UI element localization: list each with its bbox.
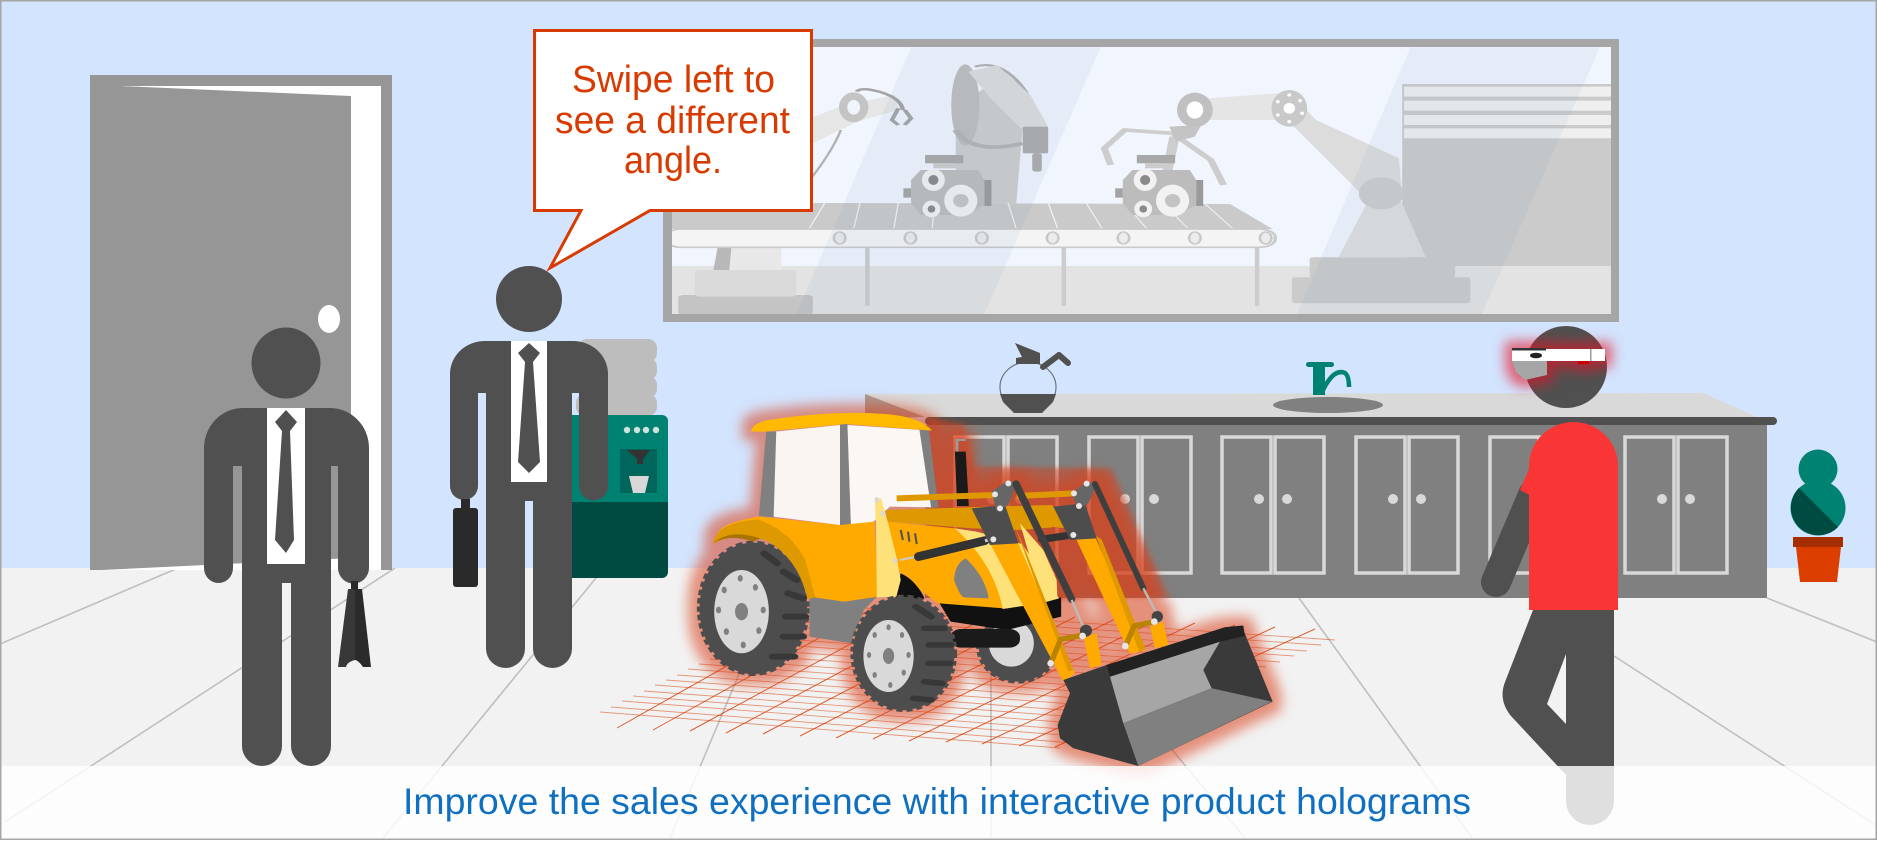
loader frame and arms [897, 480, 1168, 682]
callout: swipe instruction: see a different [555, 100, 790, 142]
icon: head [252, 328, 320, 398]
icon: door knob [318, 305, 340, 333]
icon: sink and faucet [1273, 362, 1383, 413]
door [90, 75, 392, 570]
engine parts left [903, 155, 991, 217]
fender and body [713, 517, 878, 602]
person: man in suit with bag [204, 328, 371, 766]
icon: potted plant [1790, 450, 1846, 582]
icon: coffee pot [1000, 343, 1068, 413]
caption banner: Improve the sales experience with interactive product holograms [403, 781, 1471, 822]
hologram glow behind tractor [929, 418, 1167, 603]
icon: head [496, 266, 562, 332]
rear wheel [699, 543, 807, 674]
legs [1503, 610, 1614, 825]
coffee machine [560, 415, 668, 578]
axle and underbody [894, 573, 1061, 648]
stacked cups [576, 339, 657, 416]
icon: head [1525, 326, 1607, 408]
counter [865, 393, 1777, 598]
callout: swipe instruction: angle. [624, 140, 722, 182]
engine parts right [1115, 155, 1203, 217]
callout: swipe instruction: Swipe left to [572, 59, 775, 101]
hologram tractor [699, 413, 1273, 766]
front wheel [853, 597, 954, 710]
icon: headset glasses [1512, 348, 1605, 380]
callout: swipe instruction [534, 30, 812, 268]
person: man wearing hologram headset [1496, 326, 1618, 825]
cab [751, 413, 938, 526]
red shirt [1529, 422, 1618, 610]
factory window [663, 39, 1619, 322]
caption banner [0, 766, 1877, 840]
arm [1496, 495, 1533, 582]
lower chassis [810, 597, 877, 643]
hood [875, 497, 1059, 609]
exhaust [955, 440, 969, 506]
hologram floor grid [600, 605, 1335, 748]
person: man in suit with briefcase [450, 266, 608, 668]
icon: shopping bag [338, 581, 371, 667]
rear far wheel [979, 612, 1057, 682]
icon: briefcase [453, 499, 478, 587]
bucket [1058, 626, 1273, 766]
